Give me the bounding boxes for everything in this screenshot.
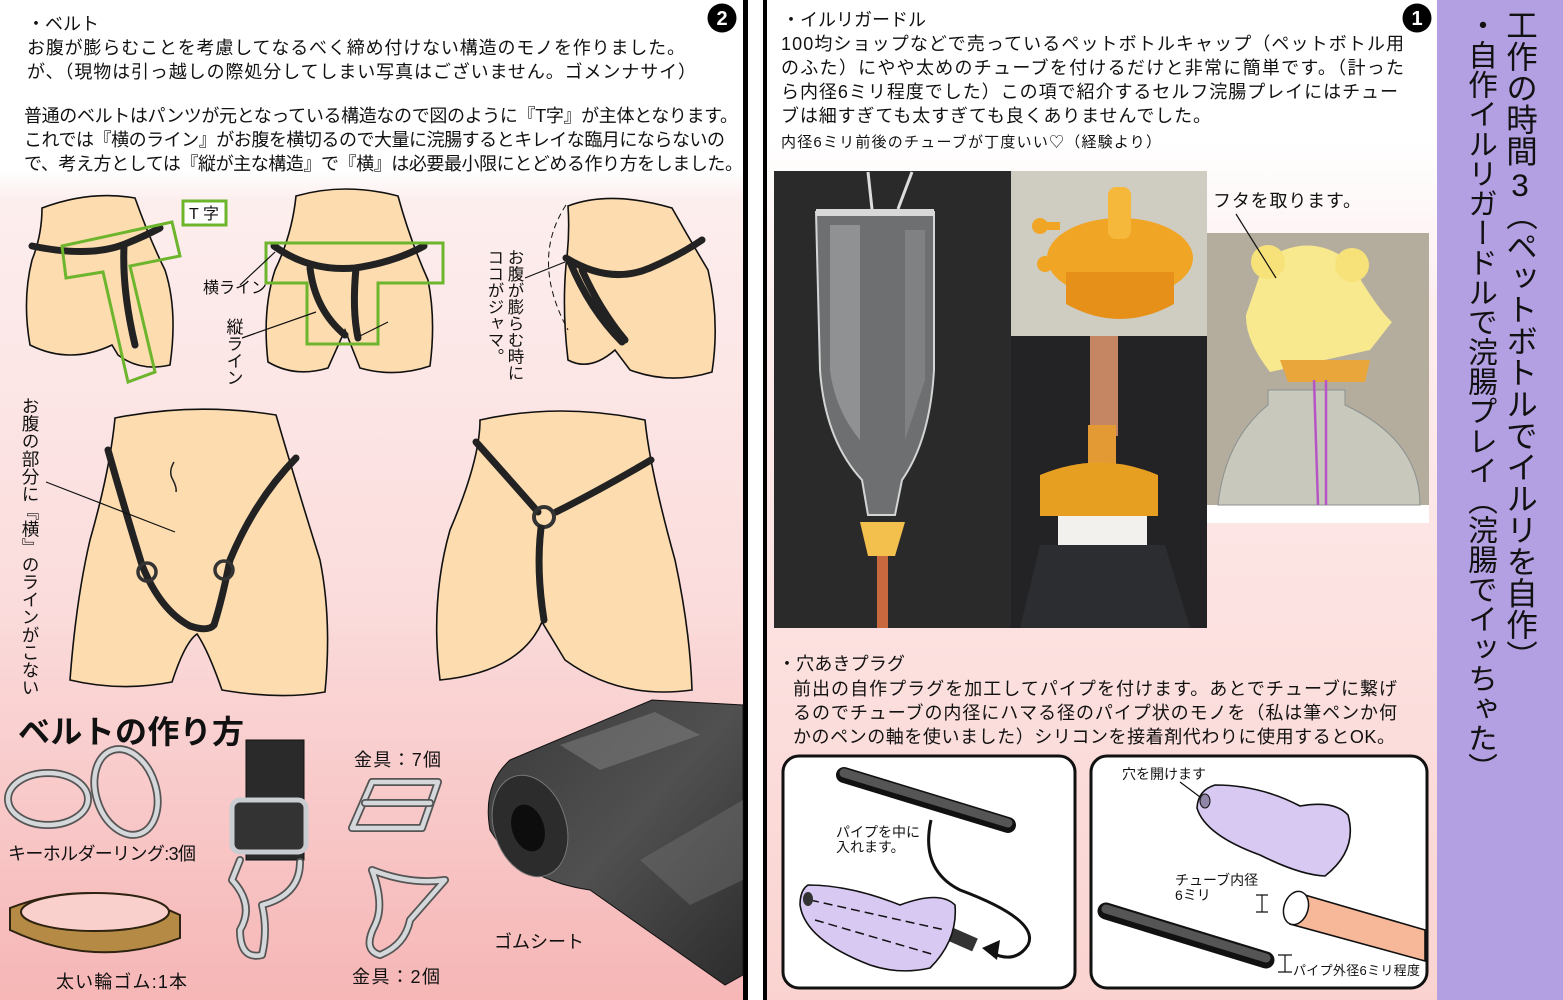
- badge: number 1: 1: [1411, 8, 1423, 30]
- rings: [138, 563, 156, 581]
- text block: belt structure explanation: 普通のベルトはパンツが元となっている構造なので図のように『T字』が主体となります。: [24, 106, 738, 126]
- T-shape outline: [62, 222, 180, 382]
- illustration: rubber band: [10, 893, 180, 952]
- label: tube inner diameter: 6ミリ: [1175, 887, 1211, 903]
- label: put pipe inside: 入れます。: [836, 839, 905, 855]
- illustration: slider fitting: [352, 782, 438, 828]
- label: fitting count seven: 金具：7個: [354, 750, 441, 770]
- text block: irrigator girdle introduction: ・イルリガードル: [782, 10, 926, 30]
- text block: irrigator girdle introduction: 内径6ミリ前後のチューブが丁度いい♡（経験より）: [781, 133, 1161, 151]
- label: belly note: お腹が膨らむ時に: [505, 249, 524, 381]
- label: vertical line: 縦ライン: [224, 318, 243, 386]
- text block: belt introduction: [27, 14, 696, 82]
- icon: plug: [1197, 785, 1350, 876]
- illustration: hook fitting: [370, 870, 445, 955]
- illustration: belt back view with T shape: [26, 196, 226, 382]
- text block: irrigator girdle introduction: ら内径6ミリ程度でした）この項で紹介するセルフ浣腸プレイにはチュー: [781, 82, 1398, 102]
- panel: right page background: [767, 0, 1437, 1000]
- panel: purple title band: [1437, 0, 1563, 1000]
- label: rubber band count: 太い輪ゴム:1本: [56, 972, 187, 992]
- text block: irrigator girdle introduction: ブは細すぎても太すぎても良くありませんでした。: [781, 105, 1211, 126]
- icon: pipe: [844, 775, 1008, 825]
- text block: plug with hole: 前出の自作プラグを加工してパイプを付けます。あとでチューブに繋げ: [793, 678, 1397, 699]
- badge: number 2: 2: [716, 8, 728, 30]
- label: T shape: T 字: [189, 205, 219, 223]
- badge: number 1: [1402, 4, 1432, 32]
- text block: belt introduction: が、（現物は引っ越しの際処分してしまい写真はございません。ゴメンナサイ）: [27, 61, 696, 82]
- icon: tube: [1256, 888, 1425, 961]
- text block: plug with hole: かのペンの軸を使いました）シリコンを接着剤代わりに使用するとOK。: [793, 727, 1395, 747]
- label: tube inner diameter: チューブ内径: [1175, 872, 1258, 888]
- panel: drill hole and tube diagram: [1091, 756, 1427, 988]
- icon: pipe: [1106, 909, 1292, 972]
- label: horizontal line: 横ライン: [203, 279, 267, 297]
- label: belly note: [485, 249, 524, 381]
- text block: irrigator girdle introduction: 100均ショップなどで売っているペットボトルキャップ（ペットボトル用: [781, 34, 1404, 54]
- text block: irrigator girdle introduction: のふた）にやや太めのチューブを付けるだけと非常に簡単です。（計った: [781, 57, 1404, 78]
- text block: belt introduction: ・ベルト: [27, 14, 99, 34]
- photo: cap attached to bottle with tube: [1011, 336, 1207, 628]
- title: vertical heading: [1464, 9, 1538, 782]
- photo: orange cap closeup: [1011, 171, 1207, 336]
- text block: plug with hole: ・穴あきプラグ: [778, 654, 905, 674]
- text block: belt introduction: お腹が膨らむことを考慮してなるべく締め付けない構造のモノを作りました。: [27, 38, 685, 58]
- label: put pipe inside: [836, 824, 920, 855]
- photo: bear cap on bottle: [1207, 233, 1429, 523]
- label: tube inner diameter: [1175, 872, 1258, 903]
- icon: curved arrow: [929, 820, 1030, 960]
- text block: irrigator girdle introduction: [781, 10, 1404, 151]
- panel: insert pipe diagram: [783, 756, 1075, 988]
- text block: plug with hole: [778, 654, 1397, 747]
- label: make a hole: 穴を開けます: [1122, 766, 1206, 782]
- illustration: strap and buckle with hook: [232, 740, 306, 956]
- label: remove the lid: [1213, 191, 1361, 278]
- badge: number 2: [708, 4, 736, 32]
- illustration: belt front view with horizontal and vertical lines: [203, 189, 443, 386]
- panel: left page background: [0, 0, 743, 1000]
- label: belly note: ココがジャマ。: [485, 249, 503, 364]
- text block: belt structure explanation: で、考え方としては『縦が主な構造』で『横』は必要最小限にとどめる作り方をしました。: [24, 154, 743, 174]
- label: put pipe inside: パイプを中に: [836, 824, 920, 840]
- title: vertical heading: ・自作イルリガードルで浣腸プレイ（浣腸でイッちゃた）: [1464, 10, 1497, 782]
- label: pipe outer diameter: パイプ外径6ミリ程度: [1293, 963, 1420, 978]
- label: rubber sheet: ゴムシート: [494, 932, 584, 952]
- label: fitting count two: 金具：2個: [352, 967, 440, 987]
- label: T shape: [183, 201, 226, 225]
- title: vertical heading: 工作の時間: [1502, 9, 1538, 167]
- illustration: large back view of finished belt: [437, 411, 692, 692]
- text block: belt structure explanation: [24, 106, 743, 174]
- title: vertical heading: （ペットボトルでイルリを自作）: [1502, 199, 1538, 672]
- illustration: key rings: [8, 741, 168, 843]
- illustration: large front view of finished belt: [20, 397, 328, 696]
- heading: how to make the belt: ベルトの作り方: [18, 714, 244, 750]
- divider: right black rule: [763, 0, 767, 1000]
- illustration: rubber sheet roll: [480, 700, 743, 985]
- divider: left black rule: [743, 0, 748, 1000]
- label: remove the lid: フタを取ります。: [1213, 191, 1361, 211]
- text block: plug with hole: るのでチューブの内径にハマる径のパイプ状のモノを（私は筆ペンか何: [793, 702, 1397, 723]
- photo: inverted bottle with tube: [774, 171, 1011, 628]
- title: vertical heading: 3: [1502, 167, 1538, 203]
- illustration: belt side view: [485, 198, 715, 381]
- label: key ring count: キーホルダーリング:3個: [8, 844, 196, 864]
- text block: belt structure explanation: これでは『横のライン』がお腹を横切るので大量に浣腸するとキレイな臨月にならないの: [24, 130, 725, 150]
- label: no horizontal line on belly: お腹の部分に『横』のラインがこない: [20, 397, 40, 696]
- icon: plug with pipe through: [800, 885, 975, 971]
